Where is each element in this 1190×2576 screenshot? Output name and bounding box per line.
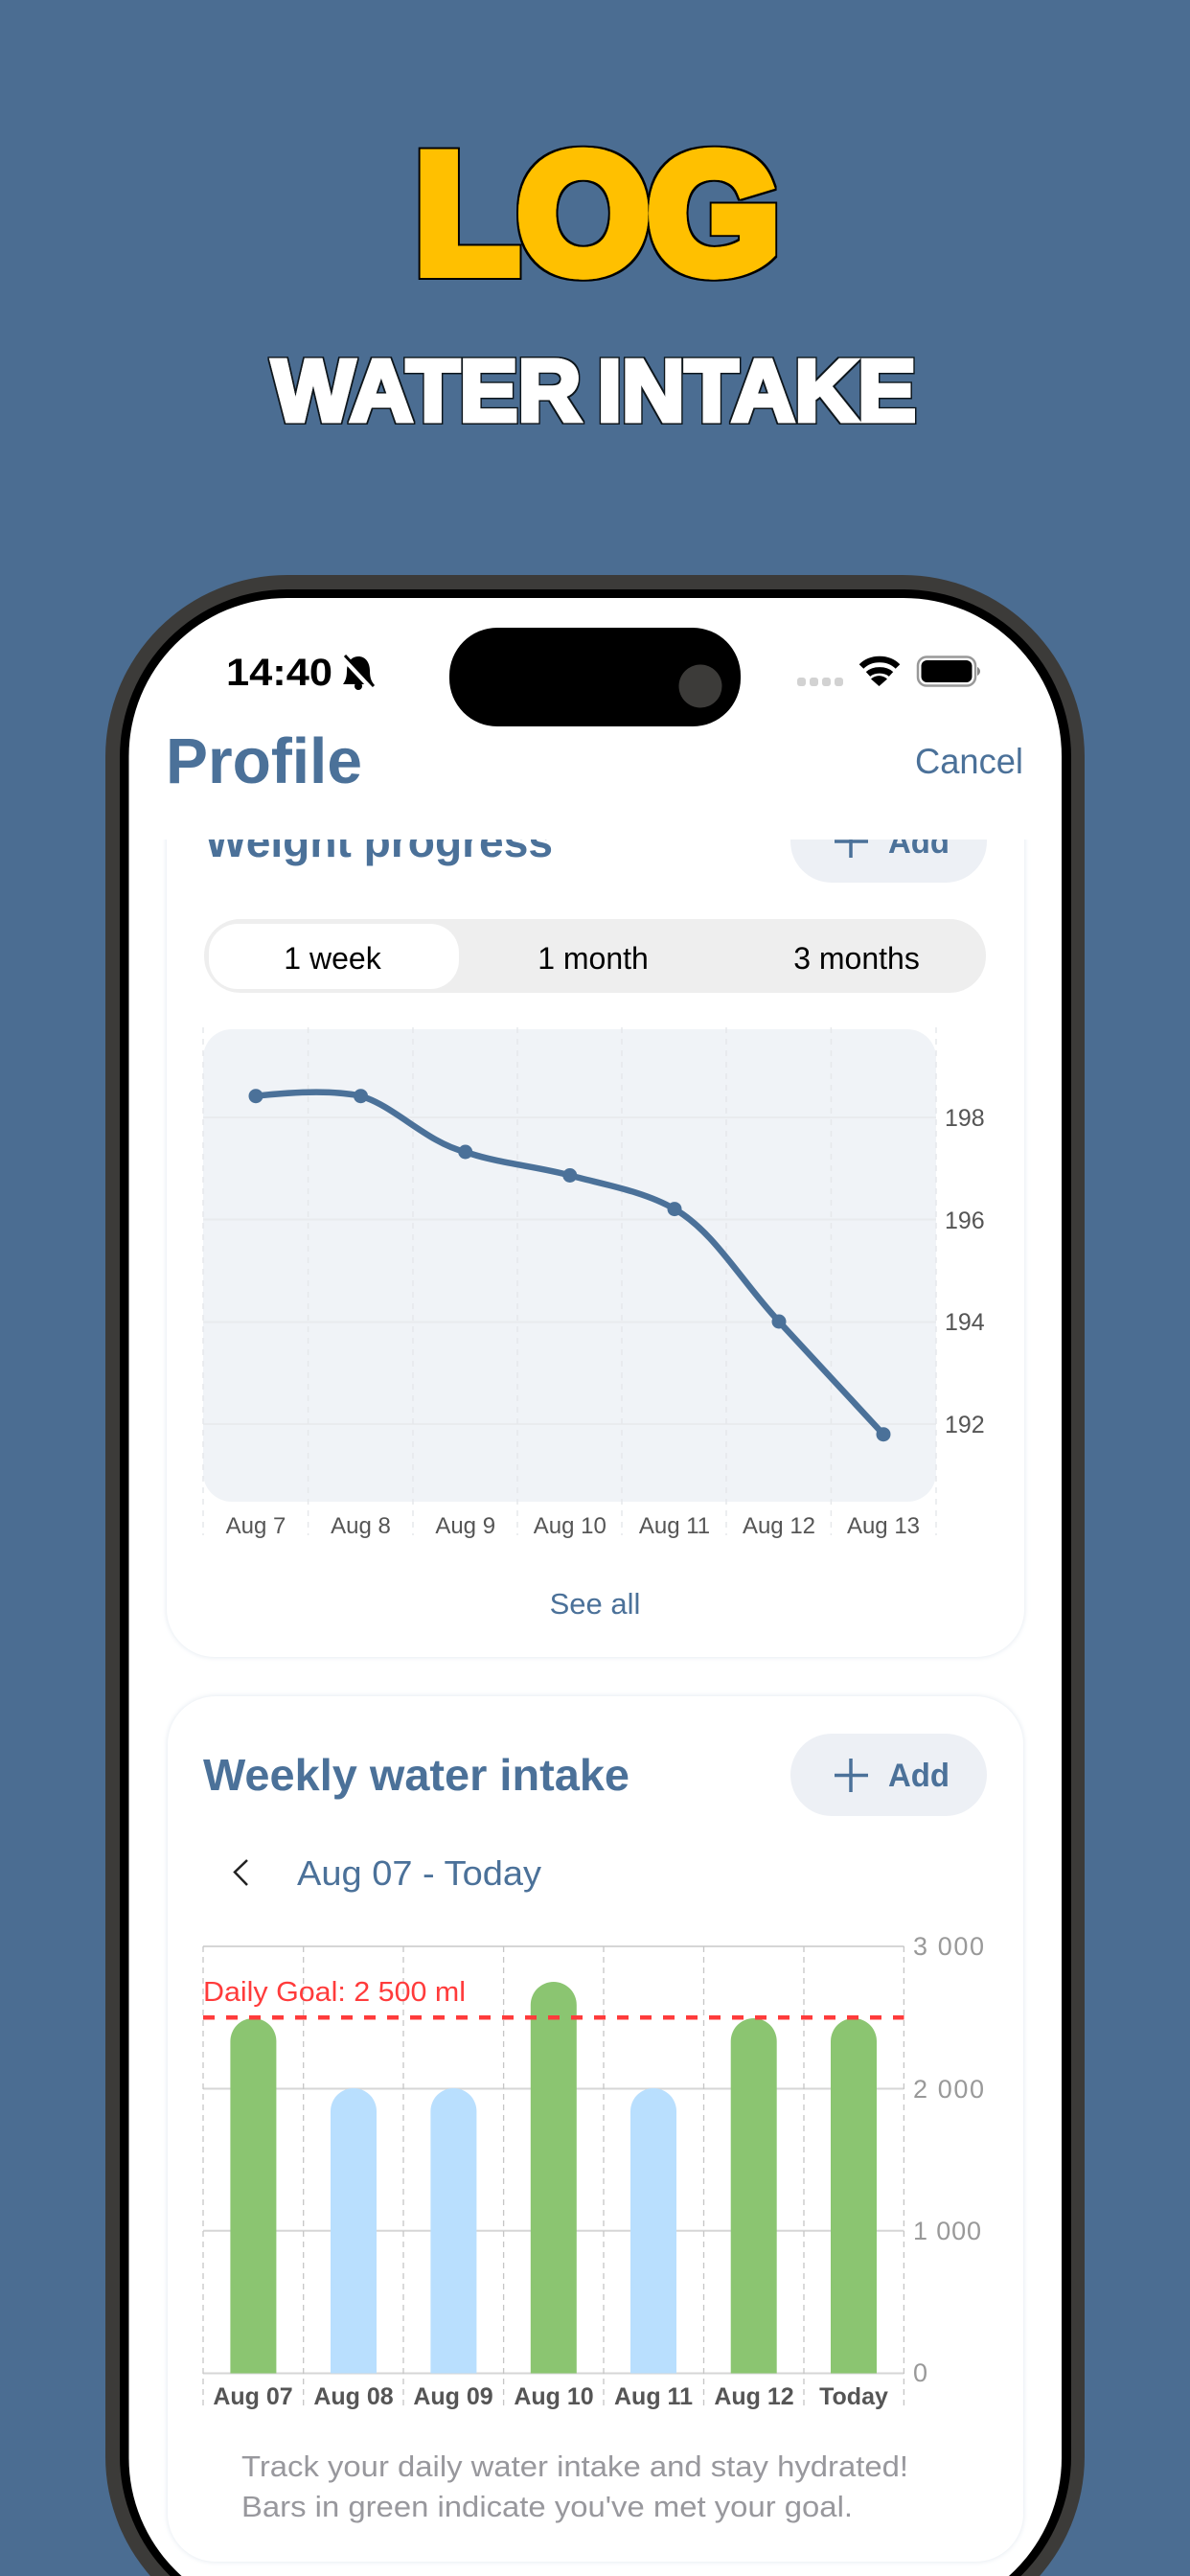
x axis labels: Aug 07 [213,2383,293,2410]
x axis labels: Aug 8 [331,1513,391,1539]
segmented control: 1 month [538,941,649,976]
y axis labels: 3 000 [913,1932,984,1961]
x axis labels: Aug 12 [743,1513,815,1539]
y axis labels: 196 [945,1208,985,1234]
bars [230,1982,877,2373]
add button [790,1734,987,1816]
title: LOG: LOG [416,121,779,308]
daily goal label: Daily Goal: 2 500 ml [203,1977,466,2008]
y axis labels [913,1932,984,2387]
x axis labels: Aug 11 [639,1513,710,1539]
x axis labels [214,2387,888,2409]
x axis labels: Aug 11 [614,2383,693,2410]
dynamic island [449,628,741,726]
caption [241,2450,908,2523]
x axis labels: Aug 13 [847,1513,920,1539]
add button [790,840,987,883]
panel: weekly water intake [168,1696,1023,2562]
y axis labels: 0 [913,2358,927,2387]
cancel link: Cancel [915,742,1023,781]
add button: Add [888,824,950,861]
icon: signal dots [797,678,843,686]
data points [249,1089,891,1441]
date navigator: Aug 07 - Today [297,1853,541,1893]
segmented control: 3 months [793,941,920,976]
card background [168,1696,1023,2562]
heading: weekly water intake: Weekly water intake [203,1750,629,1800]
date navigator [233,1859,541,1892]
camera lens [678,665,722,707]
icon: battery [918,657,980,686]
phone screen [128,598,1062,2576]
y axis labels: 1 000 [913,2217,981,2245]
heading: weight progress: Weight progress [205,816,553,866]
x axis labels [226,1517,919,1538]
y axis labels [945,1105,985,1438]
caption: Track your daily water intake and stay hydrated! [241,2450,908,2483]
y axis labels: 194 [945,1309,985,1336]
panel: weight progress [165,840,1026,1659]
subtitle: WATER INTAKE: WATER INTAKE [272,343,916,440]
caption: Bars in green indicate you've met your goal. [241,2490,853,2523]
x axis labels: Aug 12 [714,2383,794,2410]
y axis labels: 198 [945,1105,985,1132]
status bar: time: 14:40 [226,652,332,694]
phone frame [105,575,1085,2576]
x axis labels: Aug 09 [413,2383,493,2410]
x axis labels: Aug 10 [514,2383,594,2410]
bar chart [203,1932,984,2410]
weight line [256,1092,883,1435]
add button: Add [888,1758,950,1794]
x axis labels: Today [819,2383,888,2410]
x axis labels: Aug 7 [226,1513,286,1539]
daily goal line [203,2015,904,2020]
segmented control [204,919,986,993]
line chart [203,1027,985,1539]
y axis labels: 2 000 [913,2075,984,2104]
phone mockup [105,575,1085,2576]
icon: silent bell [343,656,374,690]
segmented control: 1 week [284,941,382,976]
see all link: See all [550,1587,640,1621]
card background [165,840,1026,1659]
x axis labels: Aug 10 [534,1513,606,1539]
y axis labels: 192 [945,1412,985,1438]
heading: profile: Profile [166,725,362,797]
x axis labels: Aug 9 [435,1513,495,1539]
icon: wifi [861,659,898,686]
x axis labels: Aug 08 [313,2383,394,2410]
